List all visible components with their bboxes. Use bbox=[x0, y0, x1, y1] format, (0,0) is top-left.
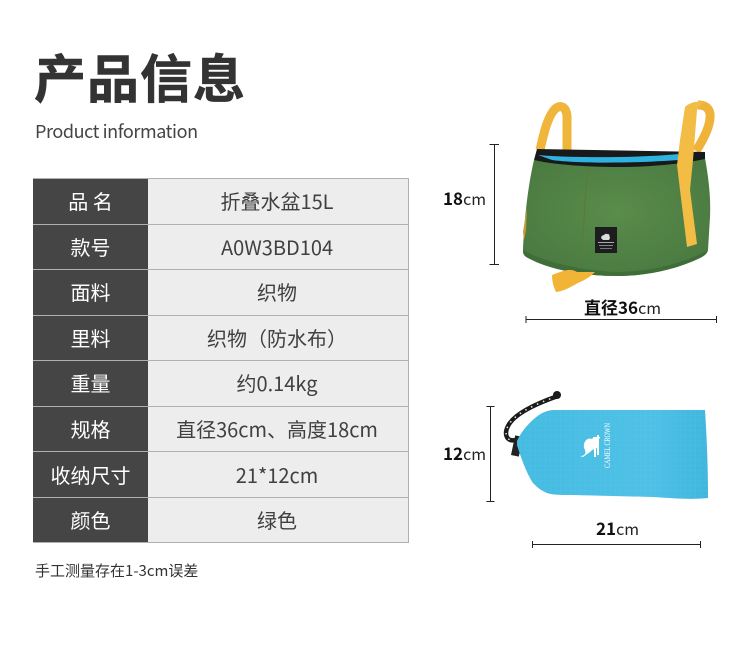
row: model number: A0W3BD104 bbox=[221, 232, 333, 261]
illustration: green folding basin bbox=[523, 100, 715, 292]
row: colour: 绿色 bbox=[257, 505, 297, 534]
footnote: 手工测量存在1-3cm误差 bbox=[35, 560, 198, 581]
dimension: basin height bbox=[443, 144, 499, 265]
row: outer material bbox=[33, 270, 297, 315]
row: stored size: 收纳尺寸 bbox=[50, 460, 130, 489]
dimension: basin diameter bbox=[526, 294, 717, 323]
rim bbox=[534, 149, 705, 167]
height line bbox=[490, 144, 499, 265]
height label: 12cm bbox=[443, 440, 486, 465]
row: model number: 款号 bbox=[70, 232, 110, 261]
height line bbox=[486, 406, 494, 502]
row: lining: 织物（防水布） bbox=[207, 323, 347, 352]
row: weight: 重量 bbox=[70, 368, 110, 397]
row: dimensions: 直径36cm、高度18cm bbox=[176, 414, 378, 443]
row: weight bbox=[33, 361, 318, 406]
subtitle: Product information bbox=[35, 118, 198, 144]
drawstring cord bbox=[506, 391, 561, 457]
row: product name bbox=[33, 179, 334, 224]
pouch body bbox=[517, 410, 708, 499]
row: product name: 品 名 bbox=[68, 186, 113, 215]
row: weight: 约0.14kg bbox=[237, 368, 317, 397]
camel logo bbox=[580, 435, 600, 457]
row: lining: 里料 bbox=[70, 323, 110, 352]
label tag bbox=[595, 227, 617, 253]
front strap bbox=[677, 102, 703, 247]
brand text: CAMEL CROWN bbox=[603, 423, 612, 468]
row: dimensions: 规格 bbox=[70, 414, 110, 443]
row: outer material: 织物 bbox=[257, 277, 297, 306]
title: 产品信息 bbox=[34, 38, 246, 113]
back handles bbox=[540, 105, 710, 152]
row: outer material: 面料 bbox=[70, 277, 110, 306]
row: model number bbox=[33, 225, 333, 269]
illustration: blue storage pouch bbox=[504, 391, 708, 499]
row: product name: 折叠水盆15L bbox=[220, 186, 334, 215]
dimension: pouch height bbox=[443, 406, 494, 502]
row: stored size bbox=[33, 452, 318, 497]
panel: specification table bbox=[33, 178, 409, 543]
row: dimensions bbox=[33, 407, 378, 451]
row: colour bbox=[33, 498, 297, 542]
bottom tab bbox=[552, 270, 595, 292]
dimension: pouch width bbox=[532, 515, 701, 548]
basin body bbox=[523, 158, 710, 276]
diameter line bbox=[526, 316, 717, 323]
height label: 18cm bbox=[443, 185, 486, 210]
diameter label: 直径36cm bbox=[584, 294, 661, 319]
row: lining bbox=[33, 316, 347, 360]
width label: 21cm bbox=[596, 515, 639, 540]
row: stored size: 21*12cm bbox=[236, 460, 318, 489]
width line bbox=[532, 541, 701, 548]
row: colour: 颜色 bbox=[70, 505, 110, 534]
